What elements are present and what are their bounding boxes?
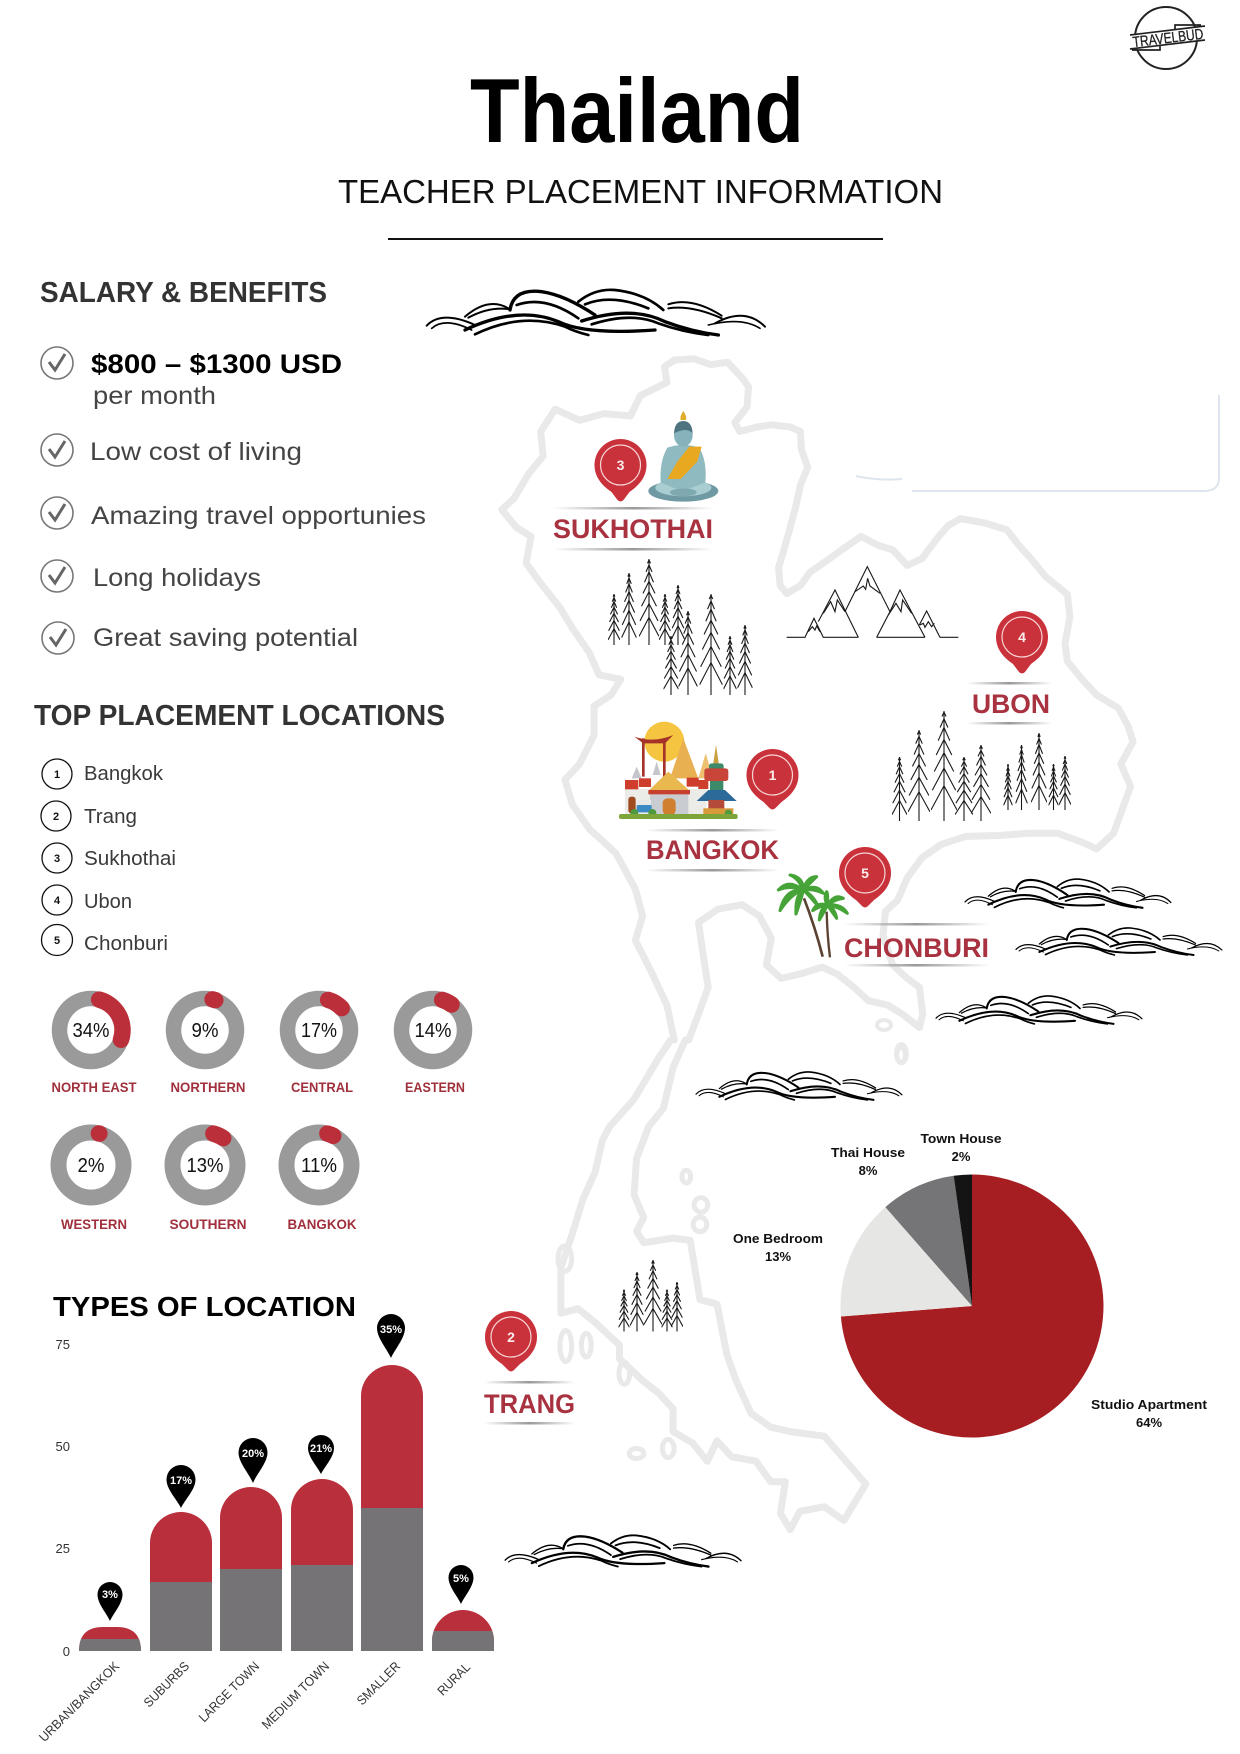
location 3: Sukhothai (84, 848, 176, 870)
marker: bangkok (646, 749, 798, 872)
icon: forest east (892, 711, 1071, 821)
y axis labels: 0 (63, 1644, 70, 1659)
marker: chonburi: CHONBURI (844, 933, 989, 963)
benefit: salary: $800 – $1300 USD (91, 349, 342, 379)
marker: bangkok: 1 (769, 767, 777, 783)
location 3: 3 (54, 853, 60, 865)
pie label: thai house: 8% (859, 1163, 878, 1178)
marker: trang (484, 1311, 575, 1424)
marker: chonburi (839, 847, 989, 966)
marker: sukhothai: SUKHOTHAI (553, 514, 713, 544)
benefit: savings (42, 622, 358, 654)
y axis labels: 75 (56, 1337, 70, 1352)
icon: forest south (618, 1260, 683, 1332)
bar: rural 5% (432, 1565, 494, 1698)
pie label: town house (920, 1131, 1002, 1164)
y axis labels: 50 (56, 1439, 70, 1454)
bar: smaller 35%: SMALLER (354, 1659, 403, 1708)
bar: large town 20%: 20% (242, 1448, 264, 1460)
bar: suburbs 17% (141, 1465, 212, 1710)
bar: medium town 21%: 21% (310, 1443, 332, 1455)
location 4: Ubon (84, 891, 132, 913)
benefit: savings: Great saving potential (93, 624, 358, 652)
marker: ubon (967, 611, 1052, 724)
slice: one bedroom (840, 1207, 972, 1316)
marker: sukhothai: 3 (617, 457, 625, 473)
pie label: studio apartment: 64% (1136, 1415, 1162, 1430)
bar: rural 5%: 5% (453, 1573, 469, 1585)
donut: bangkok 11%: BANGKOK (288, 1216, 356, 1232)
icon: bangkok temple (619, 722, 738, 819)
panel: top placement locations (34, 700, 445, 956)
donut: western 2% (58, 1132, 127, 1232)
y axis labels: 25 (56, 1541, 70, 1556)
benefit: low cost of living: Low cost of living (90, 438, 302, 466)
panel: types of location bar chart (36, 1291, 494, 1745)
bar: medium town 21%: MEDIUM TOWN (259, 1659, 332, 1732)
donut: eastern 14%: 14% (414, 1020, 452, 1042)
bar: large town 20% (196, 1438, 282, 1725)
icon: mountains (787, 567, 958, 637)
location 3 (42, 843, 176, 873)
location 2 (41, 801, 137, 831)
donut: central 17%: CENTRAL (291, 1079, 353, 1095)
benefit: travel: Amazing travel opportunies (91, 502, 426, 530)
donut: north east 34%: 34% (72, 1020, 110, 1042)
heading: types of location: TYPES OF LOCATION (53, 1291, 356, 1322)
marker: ubon: 4 (1018, 629, 1026, 645)
donut: eastern 14% (402, 998, 465, 1095)
donut: western 2%: 2% (78, 1155, 105, 1177)
pie label: thai house: Thai House (831, 1145, 905, 1160)
y axis labels (56, 1337, 70, 1659)
location 5: Chonburi (84, 933, 168, 955)
donut: southern 13%: 13% (186, 1155, 224, 1177)
donut: northern 9%: 9% (192, 1020, 219, 1042)
empty rounded box outline (856, 395, 1219, 491)
heading: top placement locations: TOP PLACEMENT LOCATIONS (34, 700, 445, 732)
marker: ubon: UBON (972, 689, 1050, 719)
pie label: one bedroom (733, 1231, 823, 1264)
title: Thailand (470, 61, 804, 162)
marker: bangkok: BANGKOK (646, 835, 779, 865)
map of Thailand outline (502, 359, 1133, 1530)
pie label: town house: Town House (920, 1131, 1002, 1146)
bar: urban/bangkok 3%: 3% (102, 1589, 118, 1601)
bar: urban/bangkok 3% (36, 1582, 141, 1745)
location 2: 2 (53, 811, 59, 823)
icon: palm trees (778, 875, 847, 957)
benefit: salary: per month (93, 382, 216, 410)
benefit: holidays: Long holidays (93, 564, 261, 592)
location 1: Bangkok (84, 763, 164, 785)
bar: smaller 35%: 35% (380, 1324, 402, 1336)
bar: suburbs 17%: 17% (170, 1475, 192, 1487)
donut: northern 9%: NORTHERN (170, 1079, 246, 1095)
heading: salary and benefits: SALARY & BENEFITS (40, 277, 327, 309)
slice: studio apartment (841, 1174, 1103, 1437)
donut: southern 13% (170, 1132, 246, 1232)
donut: central 17% (288, 998, 353, 1095)
donut: southern 13%: SOUTHERN (170, 1216, 246, 1232)
subtitle: TEACHER PLACEMENT INFORMATION (338, 173, 943, 210)
benefit: holidays (41, 560, 261, 592)
icon: buddha statue (648, 411, 718, 502)
donut: eastern 14%: EASTERN (405, 1079, 465, 1095)
donut: northern 9% (170, 998, 246, 1095)
location 5 (42, 924, 168, 956)
panel: salary and benefits (40, 277, 426, 654)
marker: sukhothai (553, 439, 713, 550)
pie label: one bedroom: 13% (765, 1249, 791, 1264)
bar: smaller 35% (354, 1314, 423, 1708)
pie label: studio apartment (1091, 1397, 1208, 1430)
pie label: studio apartment: Studio Apartment (1091, 1397, 1208, 1412)
icon: forest north (608, 559, 752, 695)
donut: western 2%: WESTERN (61, 1216, 127, 1232)
benefit: travel (41, 497, 426, 530)
bar: urban/bangkok 3%: URBAN/BANGKOK (36, 1658, 122, 1745)
donut: central 17%: 17% (301, 1020, 337, 1042)
donut: north east 34% (52, 998, 137, 1095)
location 2: Trang (84, 806, 137, 828)
location 5: 5 (54, 935, 60, 947)
pie label: town house: 2% (952, 1149, 971, 1164)
donut: north east 34%: NORTH EAST (52, 1079, 137, 1095)
panel: housing pie chart (733, 1131, 1208, 1437)
bar: rural 5%: RURAL (434, 1660, 473, 1698)
location 1: 1 (54, 769, 60, 781)
bar: large town 20%: LARGE TOWN (196, 1659, 262, 1725)
donut: bangkok 11% (286, 1132, 356, 1232)
pie label: one bedroom: One Bedroom (733, 1231, 823, 1246)
location 4 (42, 885, 132, 915)
bar: medium town 21% (259, 1435, 353, 1732)
panel: region donut charts (52, 998, 465, 1232)
location 4: 4 (54, 895, 61, 907)
logo: Travelbud: TRAVELBUD (1132, 26, 1204, 51)
marker: trang: 2 (507, 1329, 515, 1345)
benefit: salary (41, 347, 342, 410)
marker: trang: TRANG (484, 1389, 575, 1419)
bar: suburbs 17%: SUBURBS (141, 1658, 192, 1710)
donut: bangkok 11%: 11% (301, 1155, 337, 1177)
logo: Travelbud (1130, 7, 1207, 69)
decorative wave illustrations (427, 290, 1222, 1567)
slice: town house (954, 1174, 972, 1306)
slice: thai house (885, 1176, 972, 1306)
location 1 (42, 759, 164, 789)
pie label: thai house (831, 1145, 905, 1178)
benefit: low cost of living (41, 434, 302, 466)
marker: chonburi: 5 (861, 865, 869, 881)
